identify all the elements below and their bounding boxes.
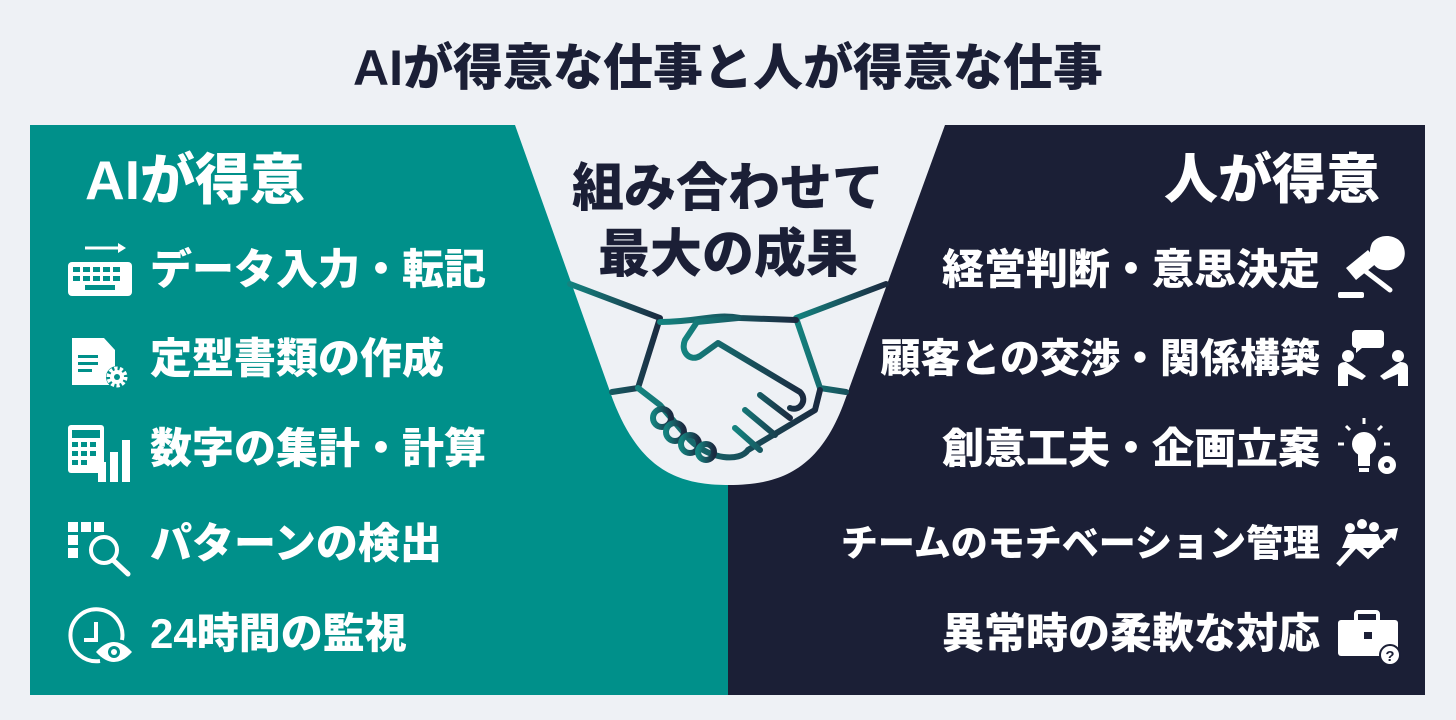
item: documents: 定型書類の作成 (150, 335, 444, 382)
center text: 最大の成果 (598, 226, 858, 284)
center text: 組み合わせて (572, 160, 884, 218)
icon: calculator chart (68, 425, 130, 482)
item: data entry: データ入力・転記 (150, 246, 486, 293)
panel: human (728, 125, 1425, 695)
icon: doc gear (72, 338, 128, 388)
icon: clock eye (70, 609, 132, 662)
icon: grid search (68, 522, 128, 574)
icons: human (1336, 236, 1408, 665)
icon: handshake (570, 284, 886, 460)
icon: keyboard (68, 243, 132, 296)
title: AIが得意な仕事と人が得意な仕事 (353, 40, 1103, 96)
heading: AI: AIが得意 (85, 149, 305, 211)
heading: human: 人が得意 (1164, 150, 1380, 210)
item: calculation: 数字の集計・計算 (150, 425, 486, 472)
item: team motivation: チームのモチベーション管理 (841, 523, 1320, 564)
list: AI items (150, 246, 486, 657)
icons: AI (68, 243, 132, 664)
item: flexible response: 異常時の柔軟な対応 (942, 610, 1320, 657)
icon: people talk (1338, 330, 1408, 386)
item: decision: 経営判断・意思決定 (942, 246, 1320, 293)
panel: AI (30, 125, 729, 695)
item: creativity: 創意工夫・企画立案 (942, 425, 1320, 472)
icon: briefcase question (1338, 612, 1400, 665)
icon: bulb gear (1338, 418, 1396, 474)
item: negotiation: 顧客との交渉・関係構築 (880, 337, 1320, 381)
icon: gavel brain (1338, 236, 1405, 298)
center text (572, 160, 884, 284)
center wedge (515, 125, 945, 485)
item: pattern: パターンの検出 (150, 520, 442, 567)
icon: briefcase question: ? (1385, 648, 1395, 665)
list: human items (841, 246, 1320, 657)
icon: team growth (1338, 519, 1398, 565)
item: monitoring: 24時間の監視 (150, 610, 407, 657)
